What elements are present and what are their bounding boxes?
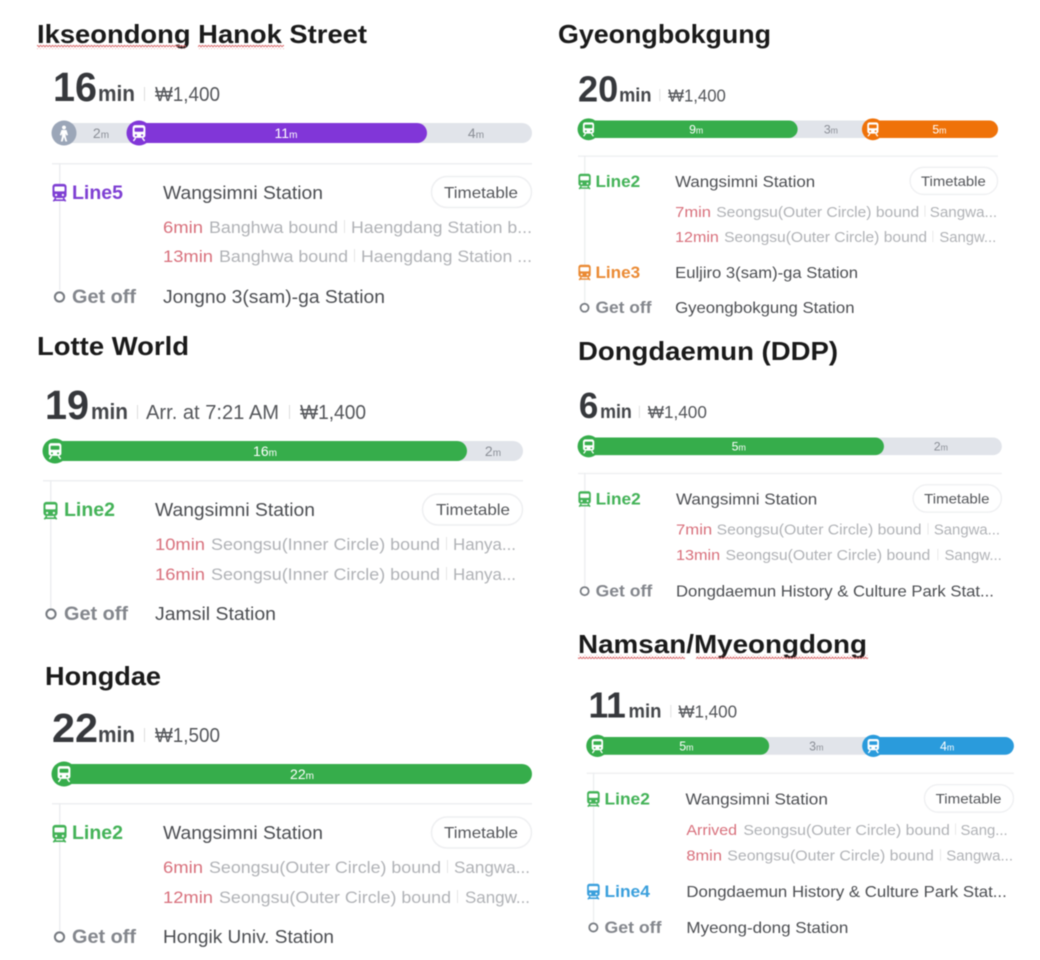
line 4 transfer	[587, 882, 1007, 901]
line 2 boarding	[52, 817, 532, 848]
spell-check underline	[578, 655, 868, 659]
line 2 boarding: Line2	[605, 790, 650, 809]
arrival times: Sang...	[960, 822, 1008, 839]
line 2 boarding	[578, 167, 998, 194]
panel: Namsan/Myeongdong	[578, 629, 1014, 937]
get off: Get off	[72, 927, 137, 948]
duration and fare: min	[600, 401, 632, 423]
duration and fare: 16	[53, 64, 97, 110]
line 5 boarding: Wangsimni Station	[163, 183, 323, 203]
route bar: 22m	[290, 766, 314, 782]
route bar: 2m	[934, 440, 948, 454]
line 2 boarding: Wangsimni Station	[155, 500, 315, 520]
get off: Get off	[596, 298, 652, 317]
duration, arrival and fare: ₩1,400	[300, 402, 366, 424]
arrival times: Seongsu(Outer Circle) bound	[724, 230, 927, 246]
route bar	[52, 120, 532, 146]
arrival times: Banghwa bound	[219, 247, 348, 266]
get off: Get off	[72, 287, 137, 308]
heading: Hongdae: Hongdae	[45, 661, 161, 691]
get off: Gyeongbokgung Station	[675, 300, 855, 317]
duration and fare: ₩1,400	[155, 84, 220, 106]
route bar: 4m	[940, 739, 954, 753]
route bar: 11m	[275, 125, 297, 141]
route card	[578, 69, 998, 317]
arrival times: 13min	[676, 547, 720, 564]
panel: Lotte World	[37, 331, 523, 625]
arrival times	[155, 535, 516, 584]
line 2 boarding: Wangsimni Station	[675, 174, 815, 191]
get off: Get off	[605, 918, 662, 937]
arrival times: Hanya...	[453, 565, 516, 584]
line 5 boarding: Timetable	[444, 185, 518, 202]
line 2 boarding: Wangsimni Station	[163, 823, 323, 843]
arrival times: Sangwa...	[946, 848, 1013, 865]
arrival times: Sangwa...	[454, 858, 530, 877]
route bar: 16m	[253, 443, 277, 459]
arrival times	[676, 522, 1002, 564]
panel: Ikseondong Hanok Street	[37, 19, 532, 308]
line 2 boarding	[587, 785, 1013, 812]
line 2 boarding	[43, 494, 522, 525]
duration and fare	[588, 684, 737, 725]
get off	[589, 918, 848, 937]
arrival times	[163, 858, 530, 907]
arrival times: Seongsu(Outer Circle) bound	[219, 888, 451, 907]
duration and fare: ₩1,400	[648, 402, 707, 422]
route bar: 2m	[93, 125, 109, 141]
heading: Dongdaemun (DDP): Dongdaemun (DDP)	[578, 336, 838, 366]
arrival times: 10min	[155, 535, 205, 554]
line 5 boarding: Line5	[72, 183, 123, 204]
arrival times: Seongsu(Outer Circle) bound	[209, 858, 441, 877]
line 2 boarding: Wangsimni Station	[685, 791, 828, 809]
line 2 boarding: Line2	[596, 490, 641, 509]
arrival times: Sangw...	[465, 888, 530, 907]
arrival times: 12min	[675, 230, 719, 246]
route bar: 4m	[468, 125, 484, 141]
line 3 transfer	[578, 263, 858, 282]
line 3 transfer: Line3	[596, 263, 640, 282]
get off: Get off	[596, 581, 653, 600]
arrival times: 16min	[155, 565, 205, 584]
route bar	[52, 762, 532, 786]
arrival times: Seongsu(Outer Circle) bound	[727, 848, 934, 865]
route card	[586, 684, 1014, 937]
get off	[581, 581, 994, 600]
duration and fare: min	[619, 85, 652, 106]
line 5 boarding	[52, 176, 532, 208]
arrival times: Sangw...	[944, 547, 1002, 564]
route bar	[578, 435, 1002, 457]
line 3 transfer: Euljiro 3(sam)-ga Station	[675, 265, 858, 282]
route card	[42, 382, 523, 625]
line 2 boarding: Timetable	[921, 173, 986, 189]
duration and fare: min	[629, 700, 661, 722]
line 4 transfer: Dongdaemun History & Culture Park Stat...	[686, 883, 1007, 901]
arrival times: 6min	[163, 858, 203, 877]
arrival times: Seongsu(Outer Circle) bound	[717, 522, 921, 539]
get off	[46, 604, 276, 625]
get off: Dongdaemun History & Culture Park Stat...	[676, 583, 994, 600]
arrival times: Seongsu(Outer Circle) bound	[743, 822, 950, 839]
arrival times: Seongsu(Inner Circle) bound	[211, 535, 440, 554]
arrival times: 7min	[676, 522, 712, 539]
line 2 boarding: Timetable	[936, 792, 1002, 808]
arrival times: Hanya...	[453, 535, 516, 554]
heading: Gyeongbokgung: Gyeongbokgung	[558, 19, 771, 49]
get off: Jongno 3(sam)-ga Station	[163, 287, 385, 307]
route bar: 9m	[689, 123, 703, 137]
heading: Namsan/Myeongdong: Namsan/Myeongdong	[578, 629, 867, 659]
arrival times	[686, 822, 1013, 865]
duration and fare	[52, 705, 220, 751]
duration, arrival and fare: Arr. at 7:21 AM	[146, 402, 279, 424]
arrival times: Haengdang Station ...	[361, 247, 532, 266]
panel: Dongdaemun (DDP)	[578, 336, 1002, 600]
get off: Myeong-dong Station	[686, 919, 848, 937]
line 2 boarding: Line2	[596, 172, 640, 191]
arrival times	[675, 205, 997, 246]
line 2 boarding: Timetable	[436, 502, 510, 519]
line 2 boarding: Wangsimni Station	[676, 492, 817, 509]
duration and fare: min	[98, 81, 135, 106]
get off: Hongik Univ. Station	[163, 927, 334, 947]
arrival times: Haengdang Station b...	[351, 218, 532, 237]
arrival times: Seongsu(Outer Circle) bound	[725, 547, 930, 564]
duration and fare: min	[98, 722, 135, 747]
arrival times	[163, 218, 532, 266]
duration, arrival and fare: 19	[45, 382, 89, 428]
line 2 boarding	[578, 485, 1001, 512]
route bar: 3m	[809, 739, 823, 753]
route card	[52, 64, 532, 308]
route bar: 3m	[824, 123, 838, 137]
route bar	[578, 118, 998, 140]
panel: Gyeongbokgung	[558, 19, 998, 317]
duration and fare: 22	[52, 705, 98, 751]
duration and fare: 6	[579, 385, 598, 426]
arrival times: Seongsu(Inner Circle) bound	[211, 565, 440, 584]
duration and fare	[578, 69, 726, 109]
duration and fare	[579, 385, 707, 426]
route bar	[42, 438, 523, 464]
arrival times: 7min	[675, 205, 711, 221]
heading: Lotte World: Lotte World	[37, 331, 189, 361]
arrival times: Sangwa...	[930, 205, 997, 221]
arrival times: 12min	[163, 888, 213, 907]
line 4 transfer: Line4	[605, 882, 651, 901]
get off	[55, 287, 385, 308]
duration and fare: ₩1,400	[668, 85, 726, 105]
get off: Jamsil Station	[155, 604, 276, 624]
heading: Ikseondong Hanok Street: Ikseondong Hanok Street	[37, 19, 367, 49]
duration, arrival and fare	[45, 382, 366, 428]
get off: Get off	[64, 604, 129, 625]
arrival times: 13min	[163, 247, 213, 266]
route bar: 2m	[485, 443, 501, 459]
arrival times: 8min	[686, 848, 722, 865]
duration and fare: ₩1,400	[678, 701, 737, 721]
route bar	[586, 735, 1014, 757]
spell-check underline	[37, 45, 284, 49]
arrival times: Sangwa...	[934, 522, 1000, 539]
duration and fare	[53, 64, 220, 110]
line 2 boarding: Timetable	[444, 825, 518, 842]
duration and fare: 11	[588, 684, 626, 725]
duration and fare: 20	[578, 69, 618, 109]
route bar: 5m	[679, 739, 694, 753]
arrival times: Seongsu(Outer Circle) bound	[716, 205, 919, 221]
line 2 boarding: Line2	[72, 823, 123, 844]
duration and fare: ₩1,500	[155, 725, 220, 747]
get off	[581, 298, 854, 317]
arrival times: Sangw...	[939, 230, 996, 246]
panel: Hongdae	[45, 661, 532, 948]
arrival times: 6min	[163, 218, 203, 237]
line 2 boarding: Timetable	[924, 491, 990, 507]
get off	[55, 927, 334, 948]
duration, arrival and fare: min	[91, 399, 128, 424]
line 2 boarding: Line2	[64, 500, 115, 521]
route card	[52, 705, 532, 948]
arrival times: Arrived	[686, 822, 737, 839]
route bar: 5m	[932, 123, 946, 137]
route card	[578, 385, 1002, 600]
route bar: 5m	[732, 440, 746, 454]
arrival times: Banghwa bound	[209, 218, 338, 237]
